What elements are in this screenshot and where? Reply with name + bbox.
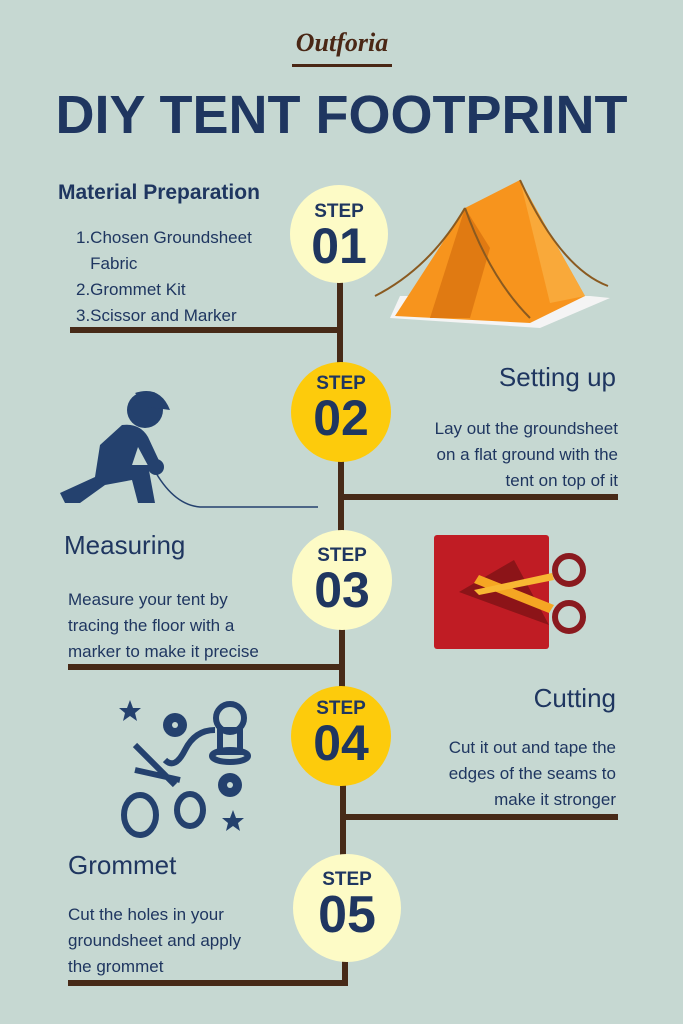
icon: grommet kit — [119, 700, 251, 838]
step 05 circle — [293, 854, 401, 962]
step 01 list: 3.Scissor and Marker — [76, 306, 237, 325]
step 02 circle: 02 — [313, 390, 369, 446]
step 03 text: Measure your tent by — [68, 590, 228, 609]
step 03 circle: STEP — [317, 545, 367, 566]
step 05 text: groundsheet and apply — [68, 931, 241, 950]
step 05 text: the grommet — [68, 957, 163, 976]
step 05 circle: STEP — [322, 869, 372, 890]
step 03 text — [68, 590, 259, 661]
logo — [292, 28, 392, 67]
step 04 text: make it stronger — [494, 790, 616, 809]
step 03 text: tracing the floor with a — [68, 616, 234, 635]
step 03 circle: 03 — [314, 562, 370, 618]
step 05 text: Cut the holes in your — [68, 905, 224, 924]
step 02 circle: STEP — [316, 373, 366, 394]
step 01 heading: Material Preparation — [58, 181, 260, 204]
step 01 list: 2.Grommet Kit — [76, 280, 186, 299]
step 05 circle: 05 — [318, 886, 376, 944]
step 01 list: Fabric — [90, 254, 137, 273]
step 04 circle: 04 — [313, 715, 369, 771]
step 04 text: Cut it out and tape the — [449, 738, 616, 757]
step 04 heading: Cutting — [534, 683, 616, 713]
step 01 list: 1.Chosen Groundsheet — [76, 228, 252, 247]
step 02 circle — [291, 362, 391, 462]
step 02 heading: Setting up — [499, 362, 616, 392]
step 04 circle — [291, 686, 391, 786]
step 01 circle: STEP — [314, 201, 364, 222]
step 01 circle — [290, 185, 388, 283]
step 01 circle: 01 — [311, 218, 367, 274]
title: DIY TENT FOOTPRINT — [55, 85, 628, 145]
step 02 text: on a flat ground with the — [437, 445, 618, 464]
icon: scissors on red — [434, 535, 586, 649]
logo: Outforia — [296, 28, 388, 57]
step 05 heading: Grommet — [68, 850, 176, 880]
step 04 text: edges of the seams to — [449, 764, 616, 783]
step 04 circle: STEP — [316, 698, 366, 719]
step 02 text: tent on top of it — [506, 471, 618, 490]
step 03 text: marker to make it precise — [68, 642, 259, 661]
step 03 heading: Measuring — [64, 530, 185, 560]
icon: kneeling man — [60, 391, 318, 508]
step 03 circle — [292, 530, 392, 630]
step 04 text — [449, 738, 616, 809]
step 01 list — [76, 228, 252, 325]
icon: tent — [374, 180, 610, 328]
step 02 text — [435, 419, 618, 490]
step 02 text: Lay out the groundsheet — [435, 419, 618, 438]
step 05 text — [68, 905, 241, 976]
